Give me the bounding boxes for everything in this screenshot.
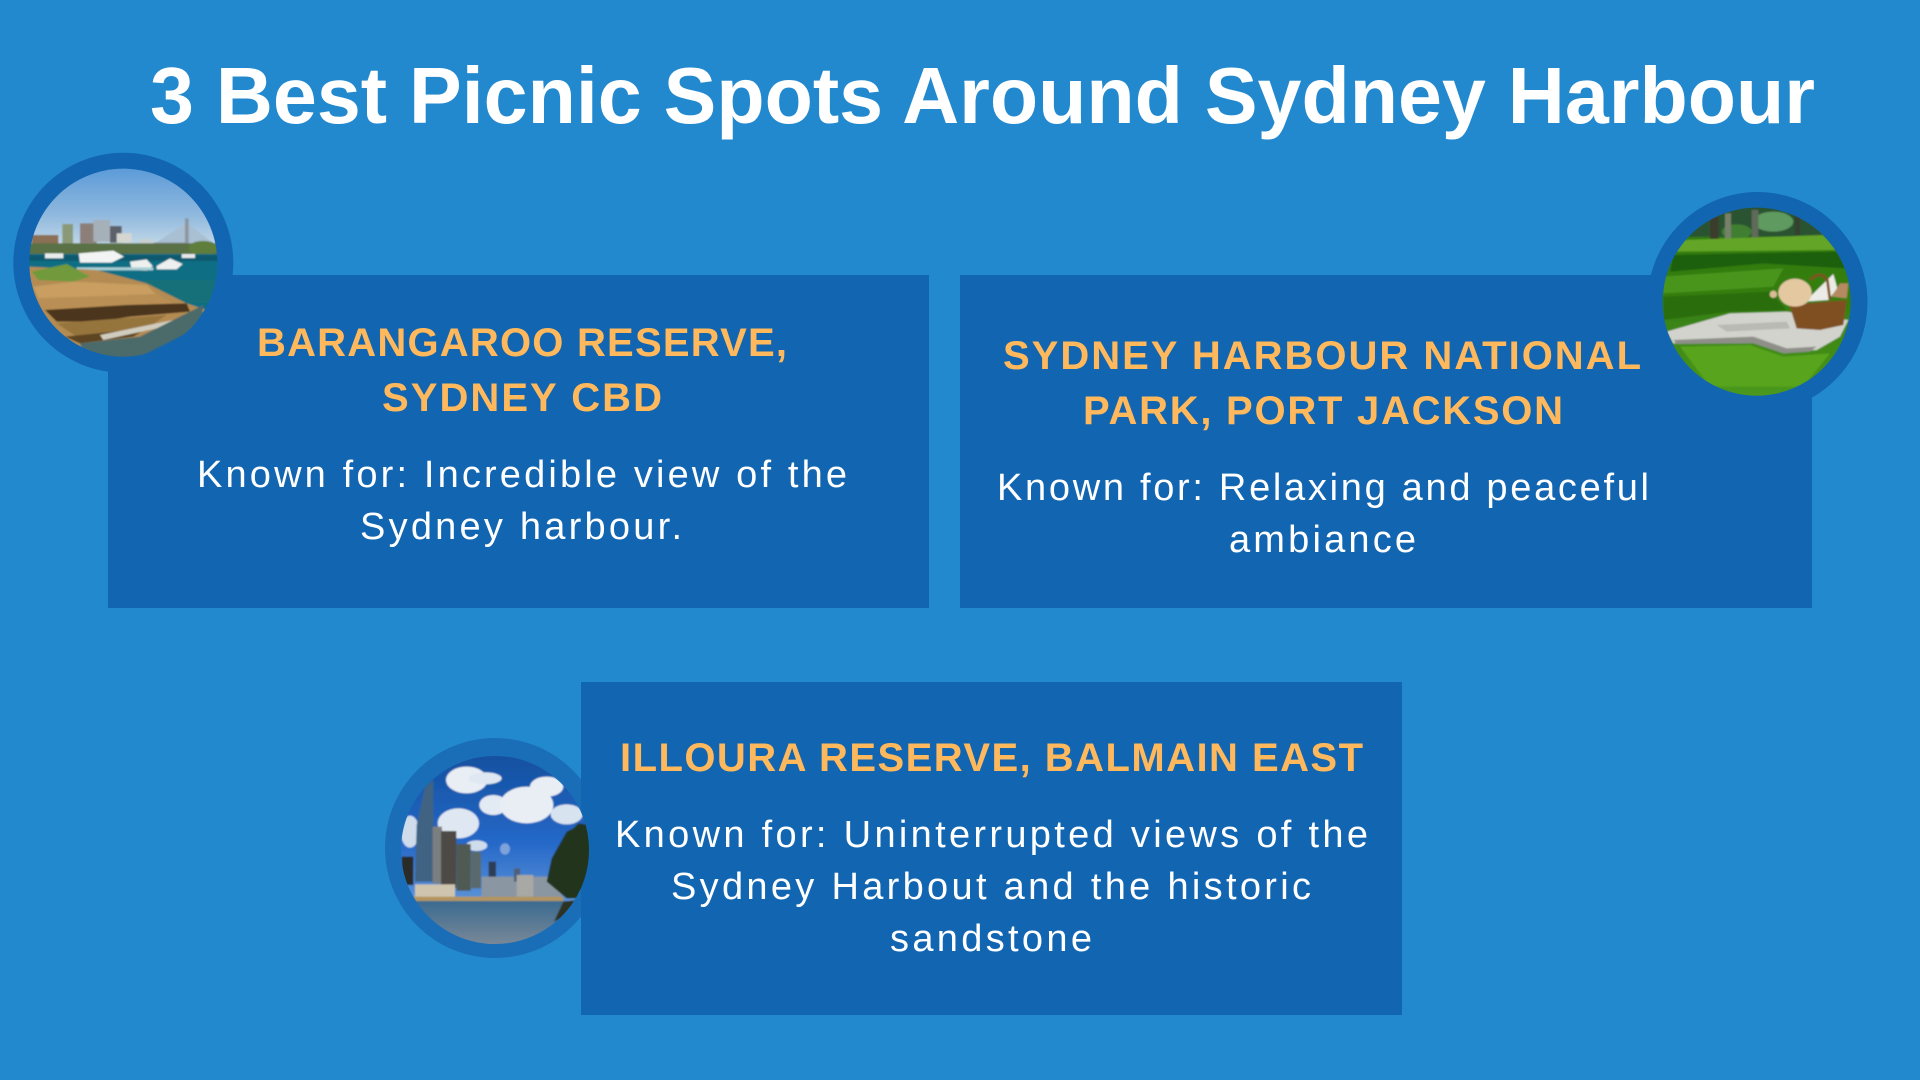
text: Illoura description	[615, 814, 1368, 960]
heading: Sydney Harbour National Park	[1003, 334, 1641, 433]
heading: Barangaroo Reserve: SYDNEY CBD	[382, 376, 662, 420]
heading: Barangaroo Reserve: BARANGAROO RESERVE,	[257, 321, 787, 365]
heading: Sydney Harbour National Park: SYDNEY HARBOUR NATIONAL	[1003, 334, 1641, 378]
heading: Barangaroo Reserve	[257, 321, 787, 420]
title: 3 Best Picnic Spots Around Sydney Harbour	[150, 51, 1815, 140]
icon: harbour photo in ring	[13, 153, 233, 373]
heading: Illoura Reserve: ILLOURA RESERVE, BALMAIN EAST	[620, 736, 1363, 780]
panel: Sydney Harbour National Park	[960, 275, 1812, 608]
text: National Park description: ambiance	[1229, 519, 1416, 561]
panel: Barangaroo Reserve	[108, 275, 929, 608]
text: Illoura description: Known for: Uninterrupted views of the	[615, 814, 1368, 856]
text: National Park description	[997, 467, 1649, 561]
text: Barangaroo description: Sydney harbour.	[360, 506, 682, 548]
icon: picnic photo in ring	[1648, 192, 1868, 412]
heading: Sydney Harbour National Park: PARK, PORT JACKSON	[1083, 389, 1563, 433]
text: National Park description: Known for: Relaxing and peaceful	[997, 467, 1649, 509]
text: Barangaroo description: Known for: Incredible view of the	[197, 454, 847, 496]
icon: skyline photo in ring	[385, 738, 605, 958]
text: Barangaroo description	[197, 454, 847, 548]
panel: Illoura Reserve	[581, 682, 1402, 1015]
text: Illoura description: Sydney Harbout and the historic	[671, 866, 1311, 908]
text: Illoura description: sandstone	[890, 918, 1092, 960]
